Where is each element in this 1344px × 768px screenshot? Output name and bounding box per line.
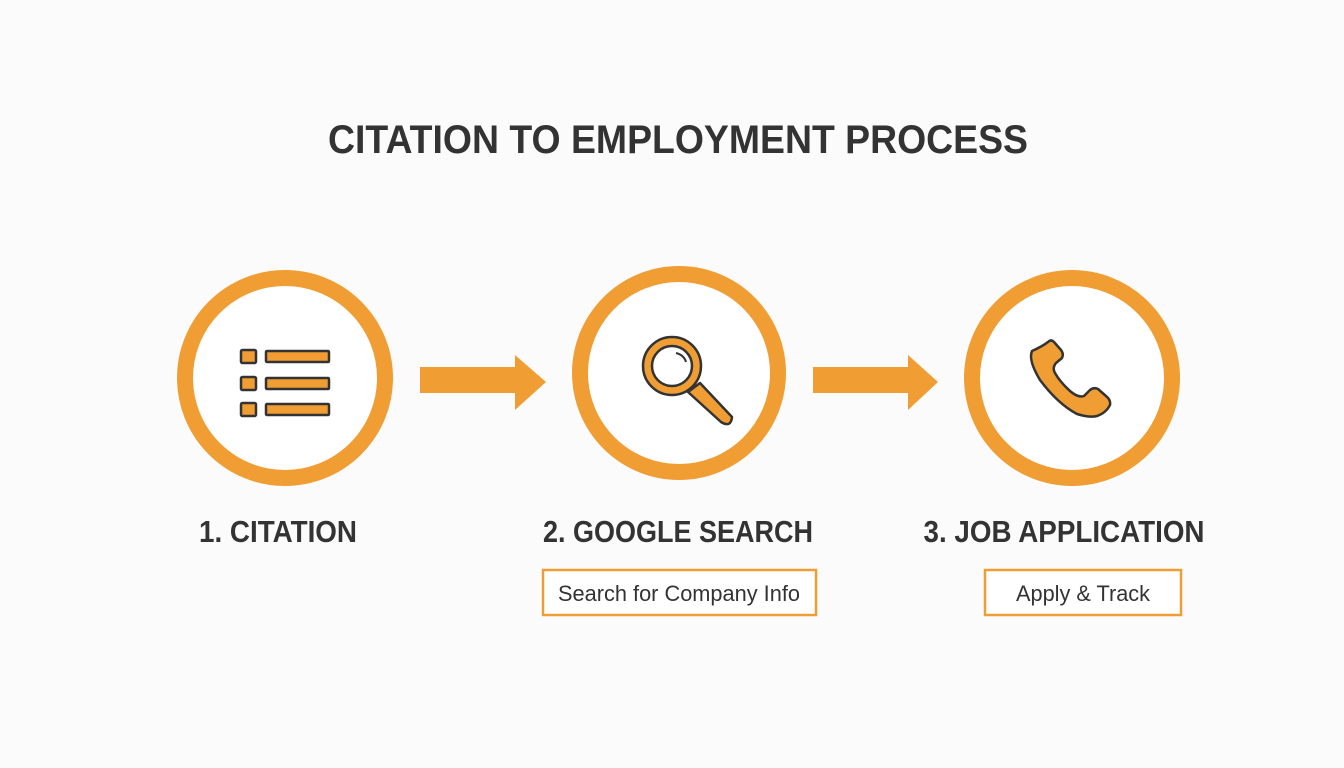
label 1: 1. CITATION [199, 514, 357, 549]
box: search for company info: Search for Company Info [558, 581, 800, 606]
box: apply & track [985, 570, 1181, 615]
panel: step 3 job application [924, 278, 1204, 615]
arrow 1 [420, 355, 546, 410]
circle 1 [185, 278, 385, 478]
panel: step 1 citation [185, 278, 385, 549]
box: apply & track: Apply & Track [1016, 581, 1151, 606]
label 3: 3. JOB APPLICATION [924, 514, 1204, 549]
panel: step 2 google search [543, 274, 816, 615]
arrow 2 [813, 355, 938, 410]
icon: phone [1031, 340, 1110, 417]
title: CITATION TO EMPLOYMENT PROCESS [328, 118, 1028, 162]
circle 3 [972, 278, 1172, 478]
box: search for company info [543, 570, 816, 615]
icon: magnifier [643, 337, 732, 424]
circle 2 [580, 274, 778, 472]
icon: list [241, 350, 329, 416]
label 2: 2. GOOGLE SEARCH [543, 514, 813, 549]
